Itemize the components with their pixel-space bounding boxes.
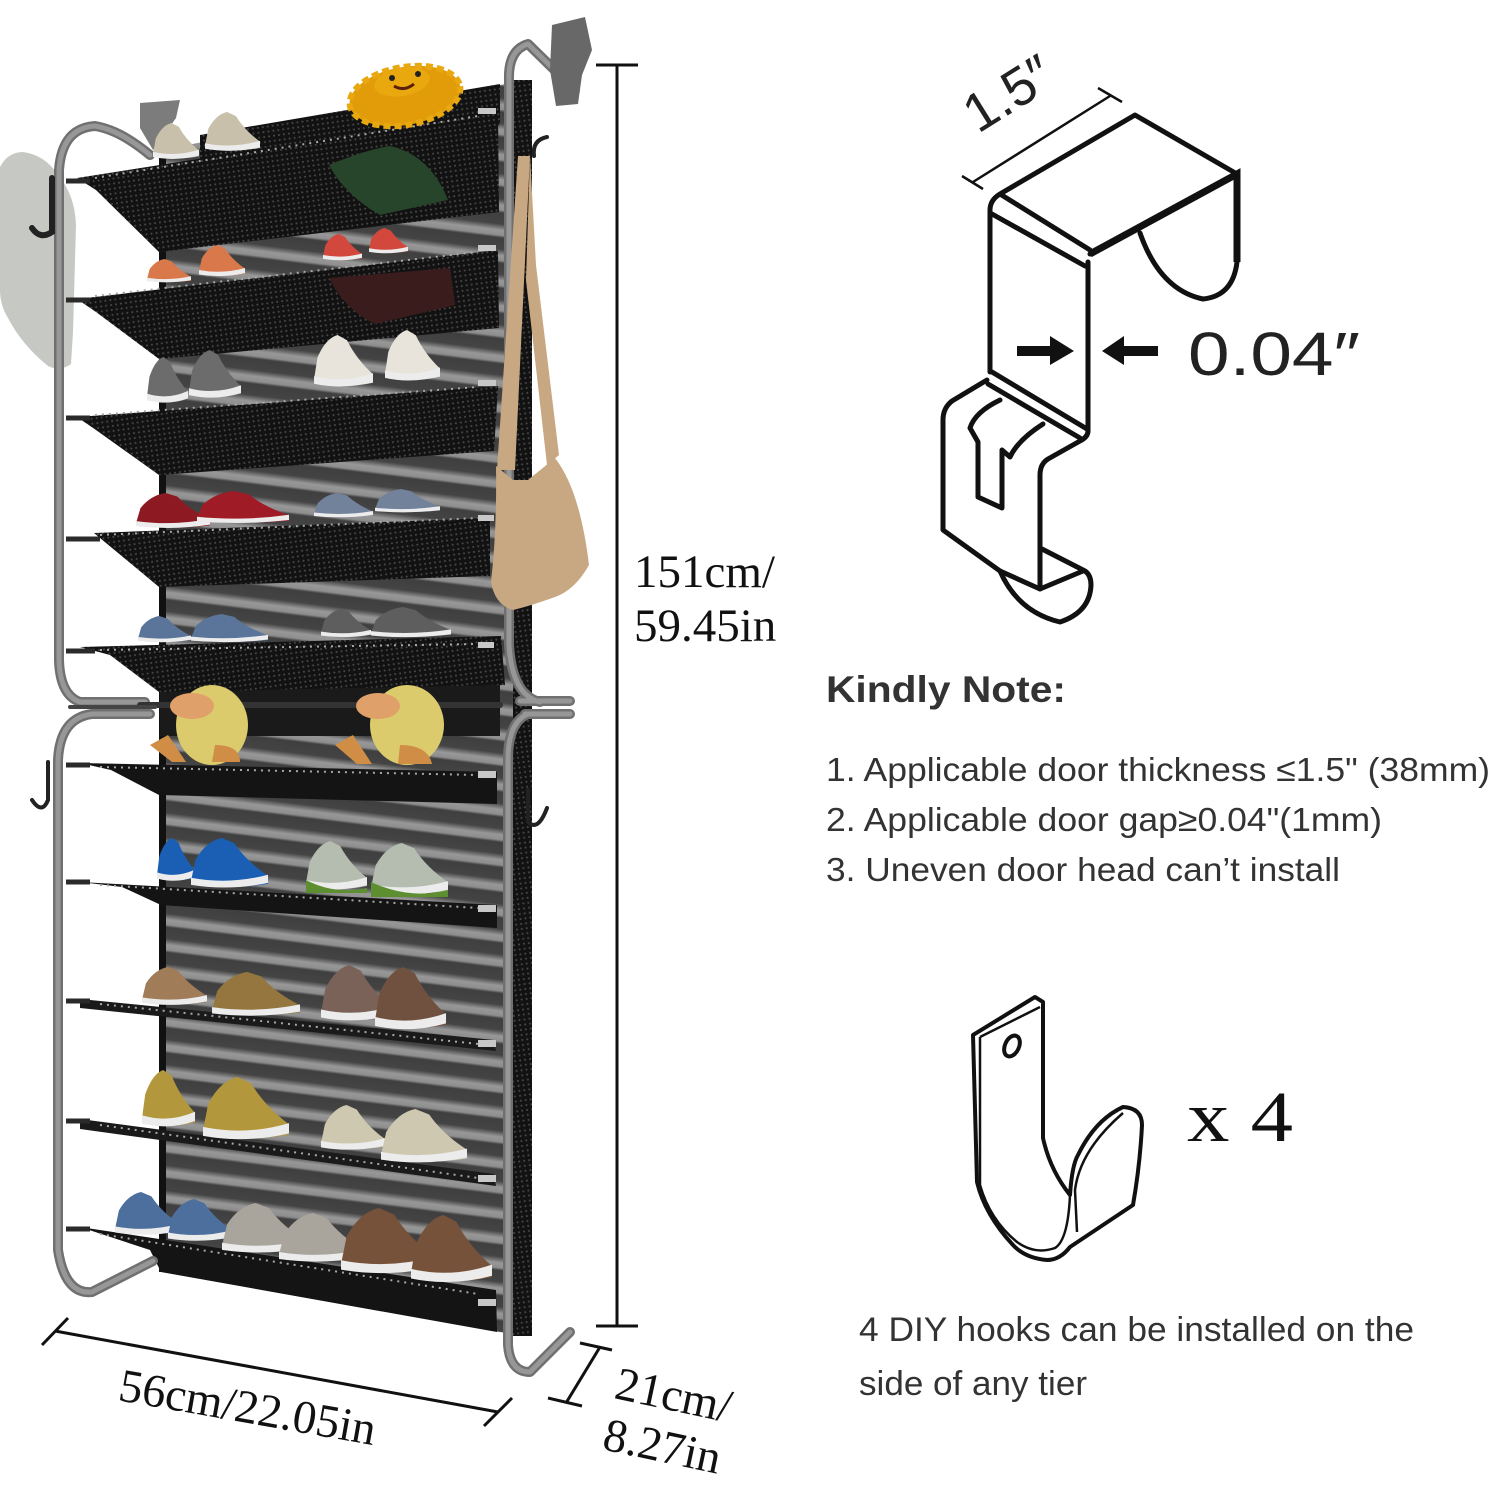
- shoes: [115, 112, 492, 1282]
- width dimension: [42, 1318, 512, 1456]
- duck toys: [150, 685, 444, 765]
- door hook diagram: 0.04″: [1188, 320, 1360, 388]
- thick edge: [1090, 174, 1237, 262]
- hooks note: 4 DIY hooks can be installed on the: [859, 1311, 1414, 1349]
- sunflower toy: [345, 58, 465, 134]
- shelf rods: [66, 181, 100, 1229]
- height dimension: 59.45in: [634, 600, 776, 652]
- door hook diagram: 1.5″: [953, 43, 1064, 144]
- diy hook icon: [973, 997, 1142, 1260]
- mesh-hidden items: [329, 146, 455, 324]
- door hooks on top: [550, 17, 592, 106]
- side hooks: [32, 137, 547, 825]
- rack frame rails: [58, 44, 575, 1372]
- shelf end tabs: [478, 108, 496, 1306]
- note list: [826, 752, 1490, 889]
- thickness arrows: [1017, 336, 1158, 365]
- height dimension: [596, 65, 776, 1326]
- hooks note: side of any tier: [859, 1365, 1087, 1403]
- depth dimension: 8.27in: [599, 1409, 726, 1484]
- dimension 1.5 in: [962, 88, 1122, 189]
- door hook diagram: [943, 43, 1360, 622]
- shelf front dots: [95, 116, 478, 1294]
- shoe rack: [0, 17, 592, 1372]
- hook outline: [990, 115, 1237, 589]
- width dimension: 56cm/22.05in: [115, 1360, 380, 1456]
- kindly note heading: Kindly Note:: [826, 669, 1066, 710]
- note list: 1. Applicable door thickness ≤1.5" (38mm): [826, 752, 1490, 789]
- hat: [0, 152, 76, 369]
- height dimension: 151cm/: [634, 546, 776, 598]
- note list: 2. Applicable door gap≥0.04"(1mm): [826, 802, 1382, 839]
- rack back panel: [161, 80, 532, 1336]
- note list: 3. Uneven door head can’t install: [826, 852, 1340, 889]
- hooks note: [859, 1311, 1414, 1403]
- depth dimension: [548, 1343, 737, 1484]
- shelves: [77, 112, 505, 1332]
- x 4 label: x 4: [1187, 1077, 1293, 1157]
- bag: [491, 156, 589, 610]
- depth dimension: 21cm/: [611, 1358, 737, 1433]
